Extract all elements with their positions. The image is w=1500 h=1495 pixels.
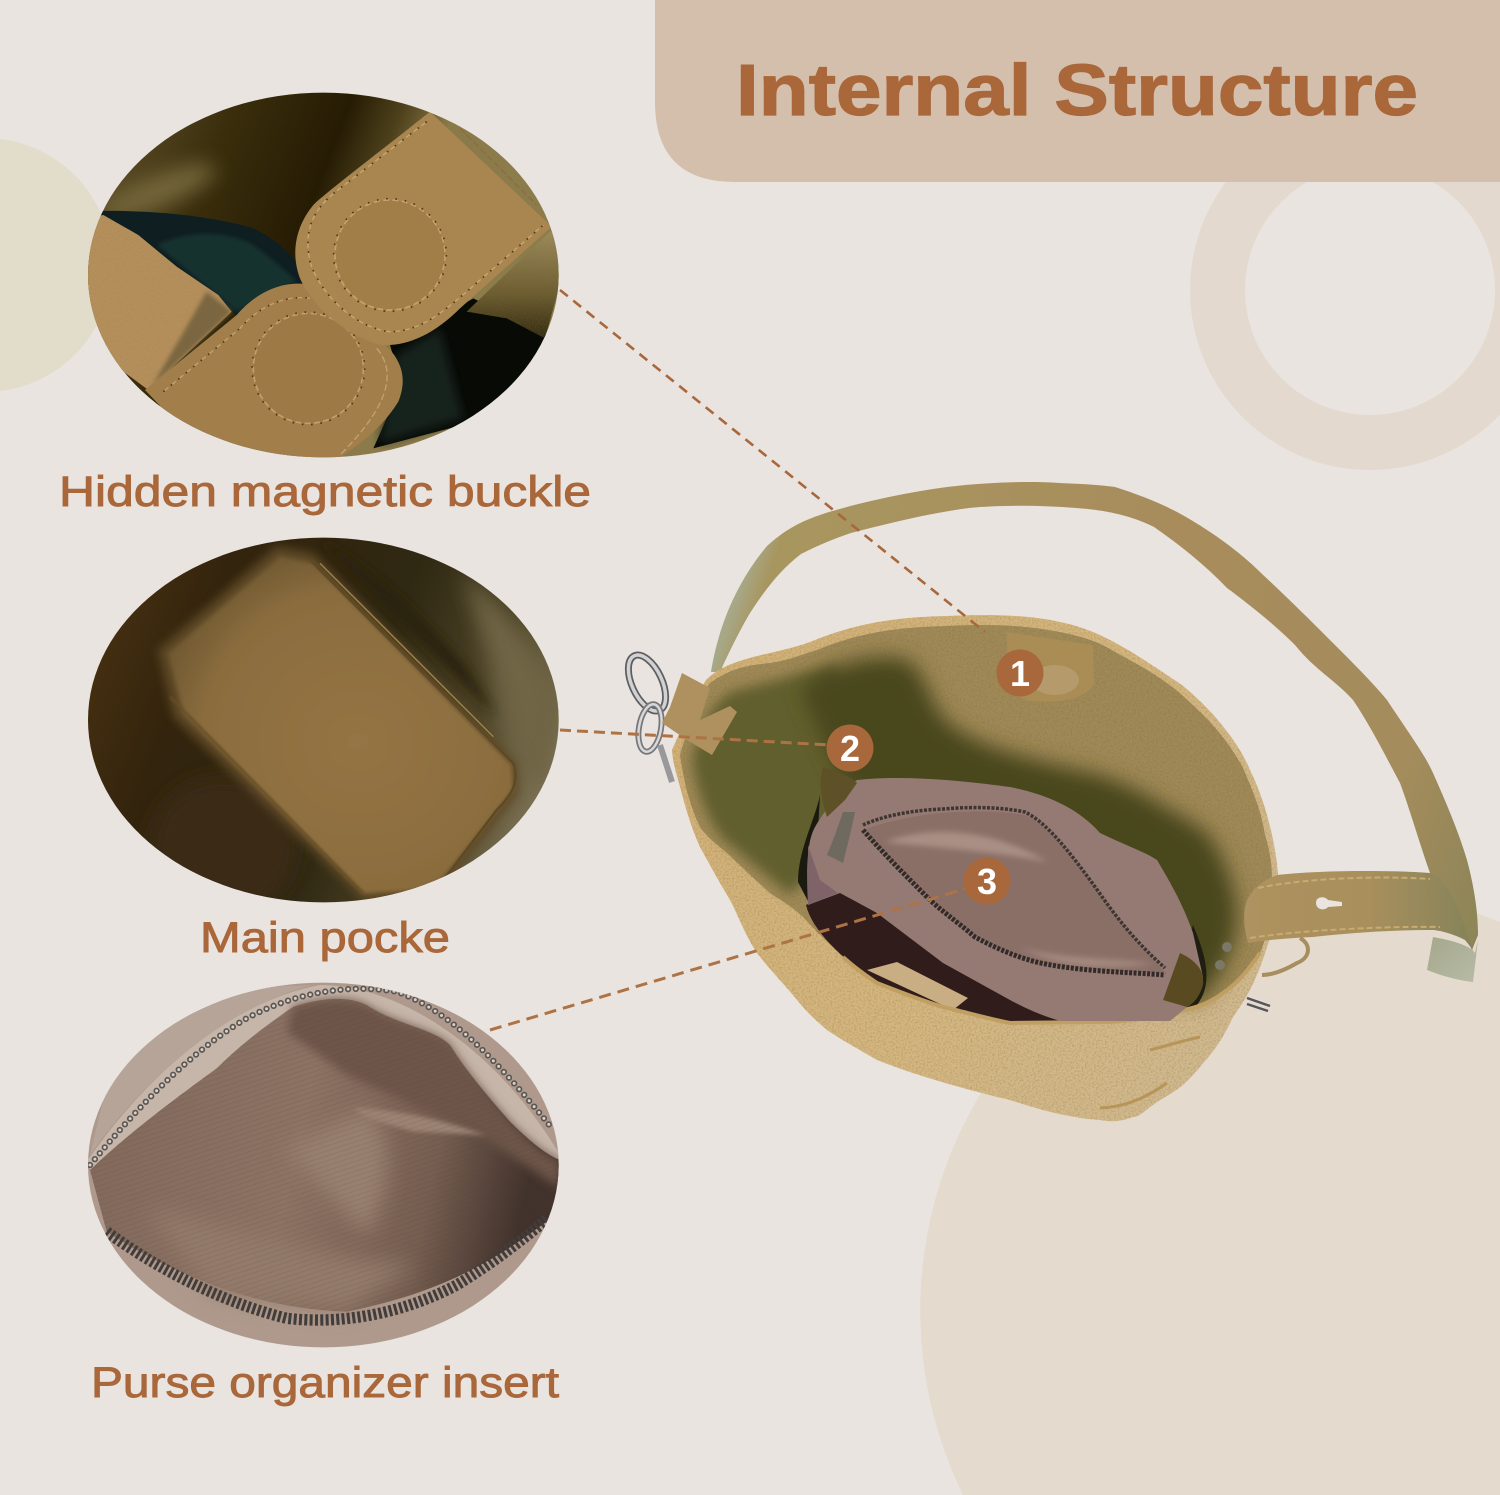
background circle: left [0,139,112,391]
right strap band [1244,871,1478,982]
title banner [655,0,1500,182]
top zipper [90,989,553,1165]
bag outer body [672,615,1278,1121]
shadow lower right [373,298,553,448]
title: Internal Structure [736,51,1418,131]
organizer base pad [158,547,518,903]
strap [711,482,1478,950]
dark bag floor [806,890,1120,1023]
suede flap [87,215,232,390]
panel: purse organizer insert photo [80,975,570,1355]
zipper pull [827,812,855,863]
gold suede right [467,230,563,338]
interior lining [90,999,560,1312]
interior dark shadow [800,657,1237,1000]
marker 3 [964,858,1010,904]
marker 2 [826,724,874,772]
zipper end tabs [821,767,857,817]
magnetic snap tab [1006,632,1094,702]
lower leather tab [145,284,403,462]
background circle: bottom right [920,890,1500,1495]
dashed leader line 3 [490,888,968,1030]
lower zipper [107,1218,548,1320]
panel: main pocket photo [80,530,570,917]
pale upper lining [87,985,560,1175]
strap ring [1262,938,1308,975]
panel: hidden magnetic buckle photo [80,85,570,465]
dark gap beside pouch [798,795,820,905]
label: purse organizer insert: Purse organizer insert [91,1359,559,1407]
background ring: top right [1190,110,1500,470]
marker 3: 3 [977,861,997,902]
organizer pouch [807,767,1203,1021]
label: hidden magnetic buckle: Hidden magnetic buckle [59,468,591,516]
bag interior suede [680,625,1272,1023]
marker 1 [996,650,1044,696]
side hardware [1215,942,1270,1011]
marker 1: 1 [1010,653,1030,694]
dark teal shadow [100,211,310,315]
label: main pocket: Main pocke [200,914,450,962]
interior mid olive [692,664,860,895]
inner card tag [867,962,968,1010]
front rim [843,953,1260,1023]
marker 2: 2 [840,728,860,769]
dashed leader line 1 [560,290,985,632]
carabiner clasp [621,649,697,782]
illustration: bucket bag with strap [621,482,1478,1121]
bag seams [1100,1037,1200,1108]
upper leather tab [295,112,552,345]
left strap tab [662,673,737,755]
dashed leader line 2 [560,730,830,745]
